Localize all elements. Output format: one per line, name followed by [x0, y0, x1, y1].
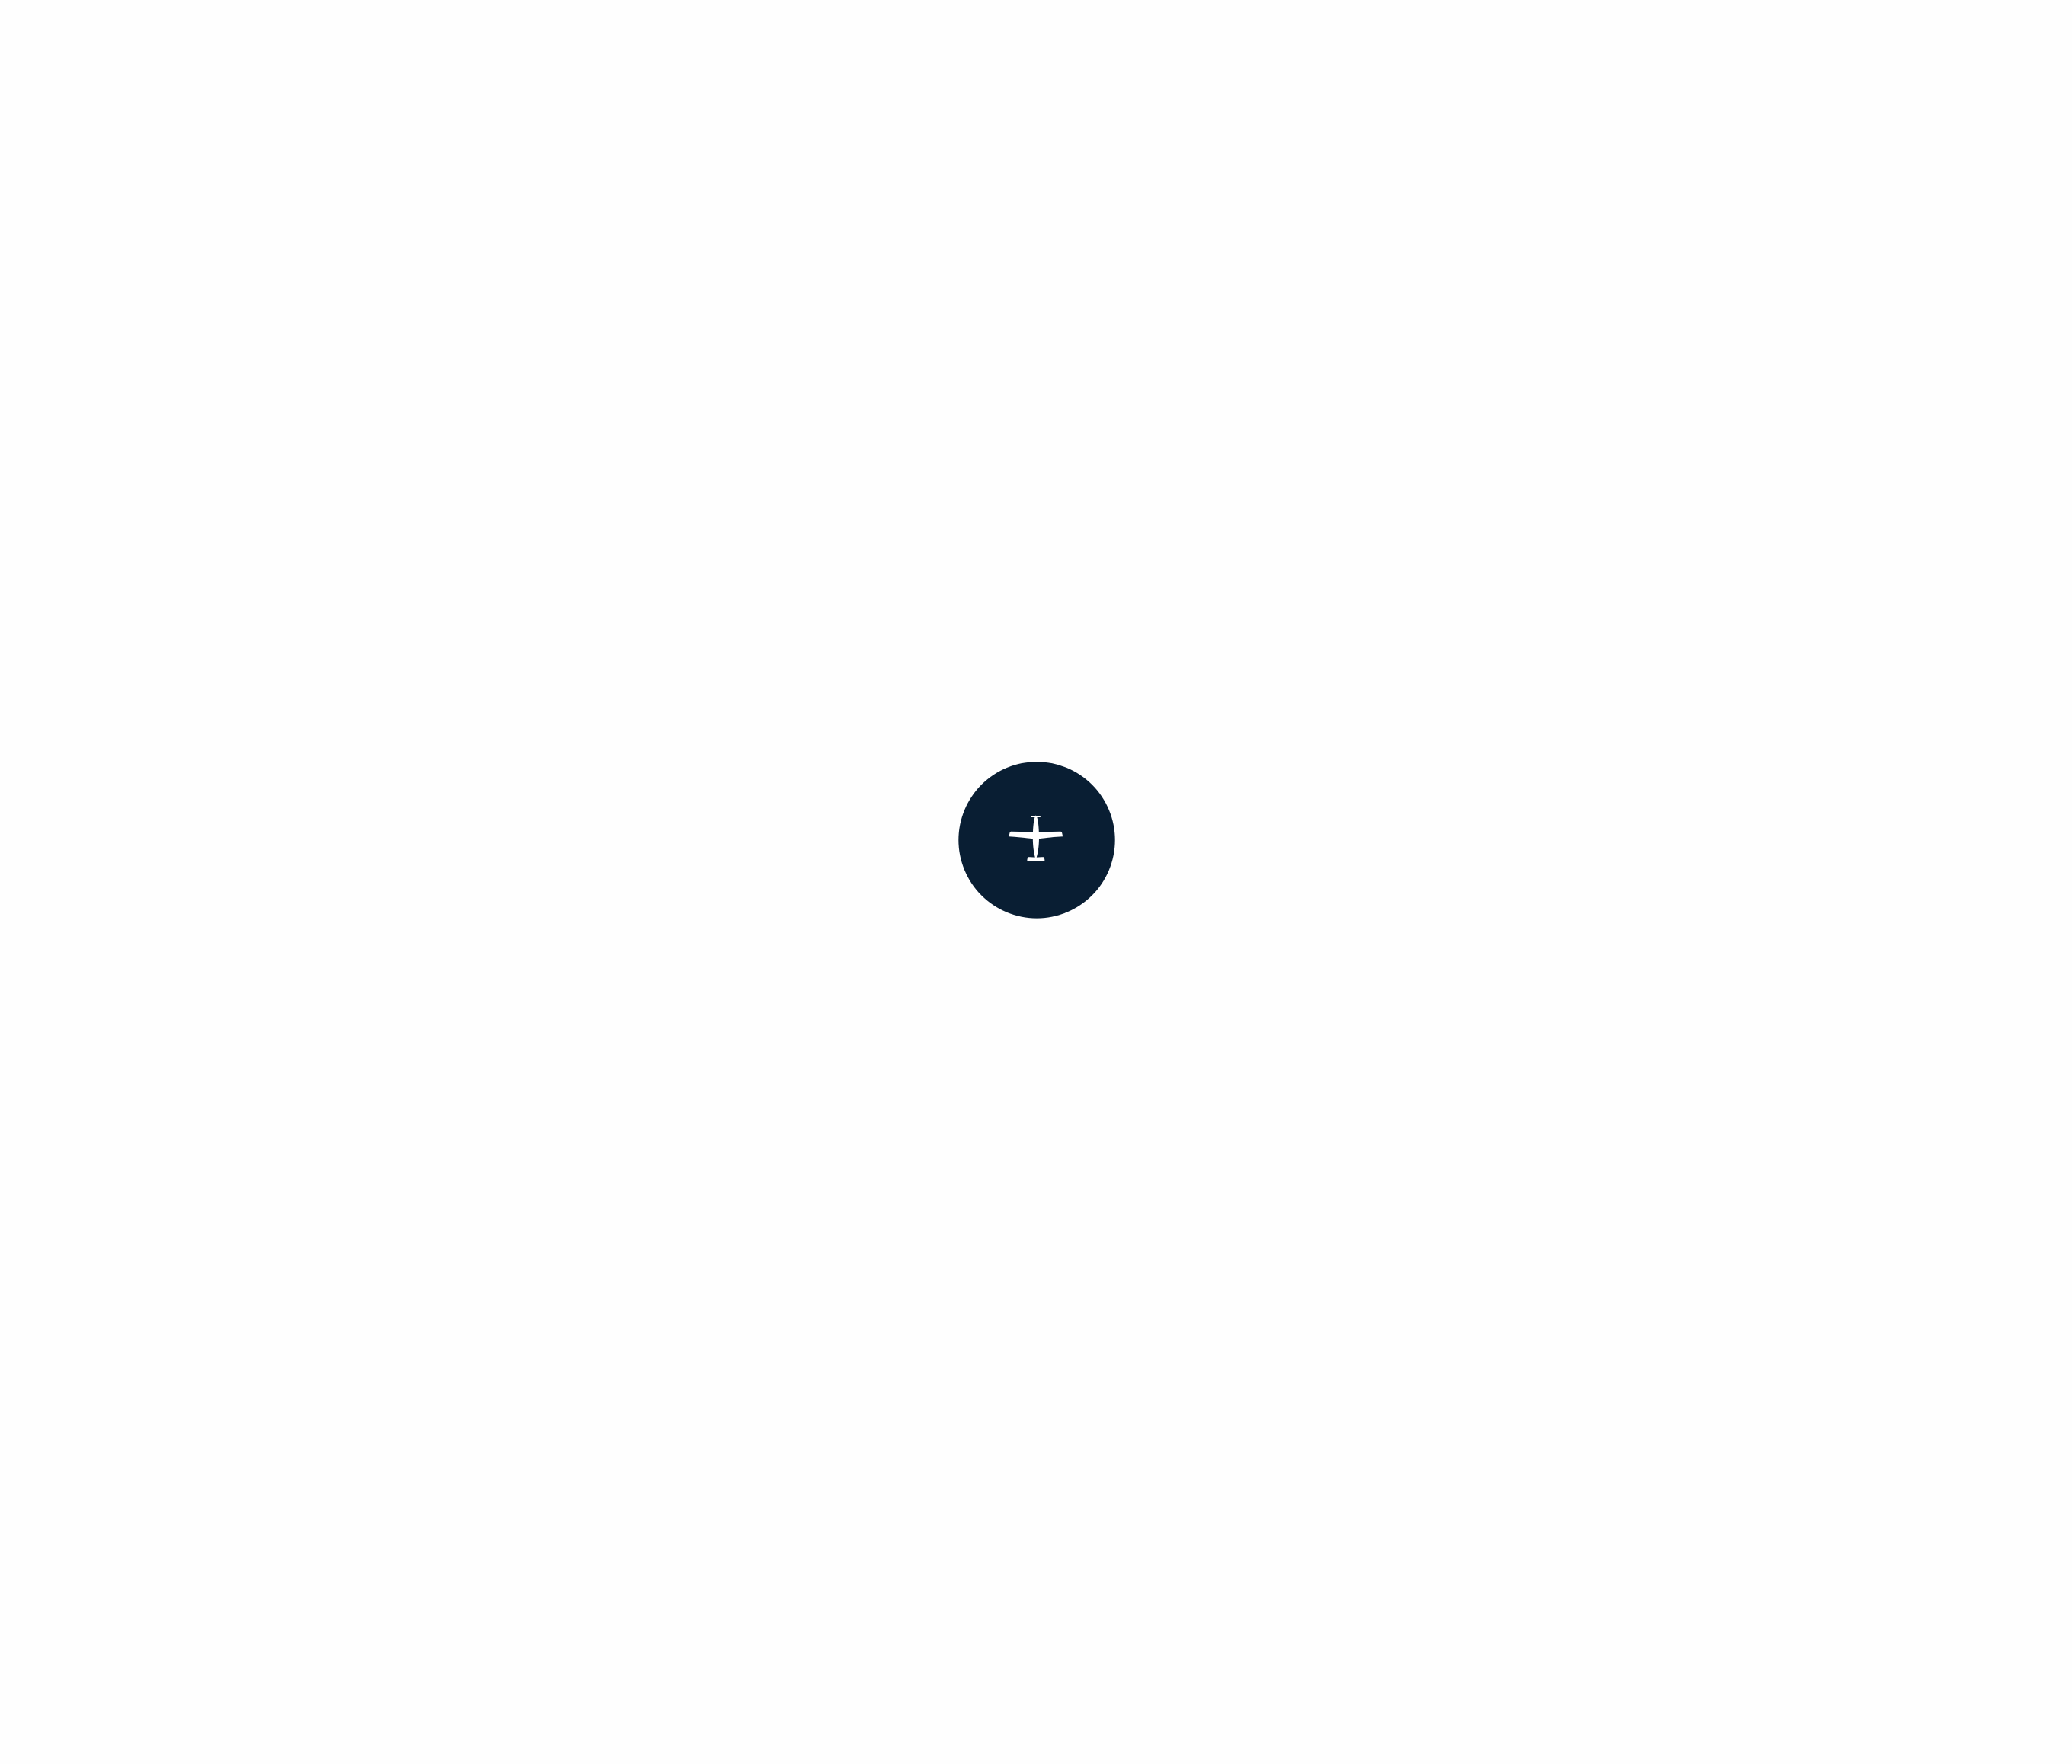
icon: airplane badge	[958, 762, 1115, 919]
icon: white airplane	[1009, 815, 1063, 861]
navy circle	[958, 762, 1115, 919]
